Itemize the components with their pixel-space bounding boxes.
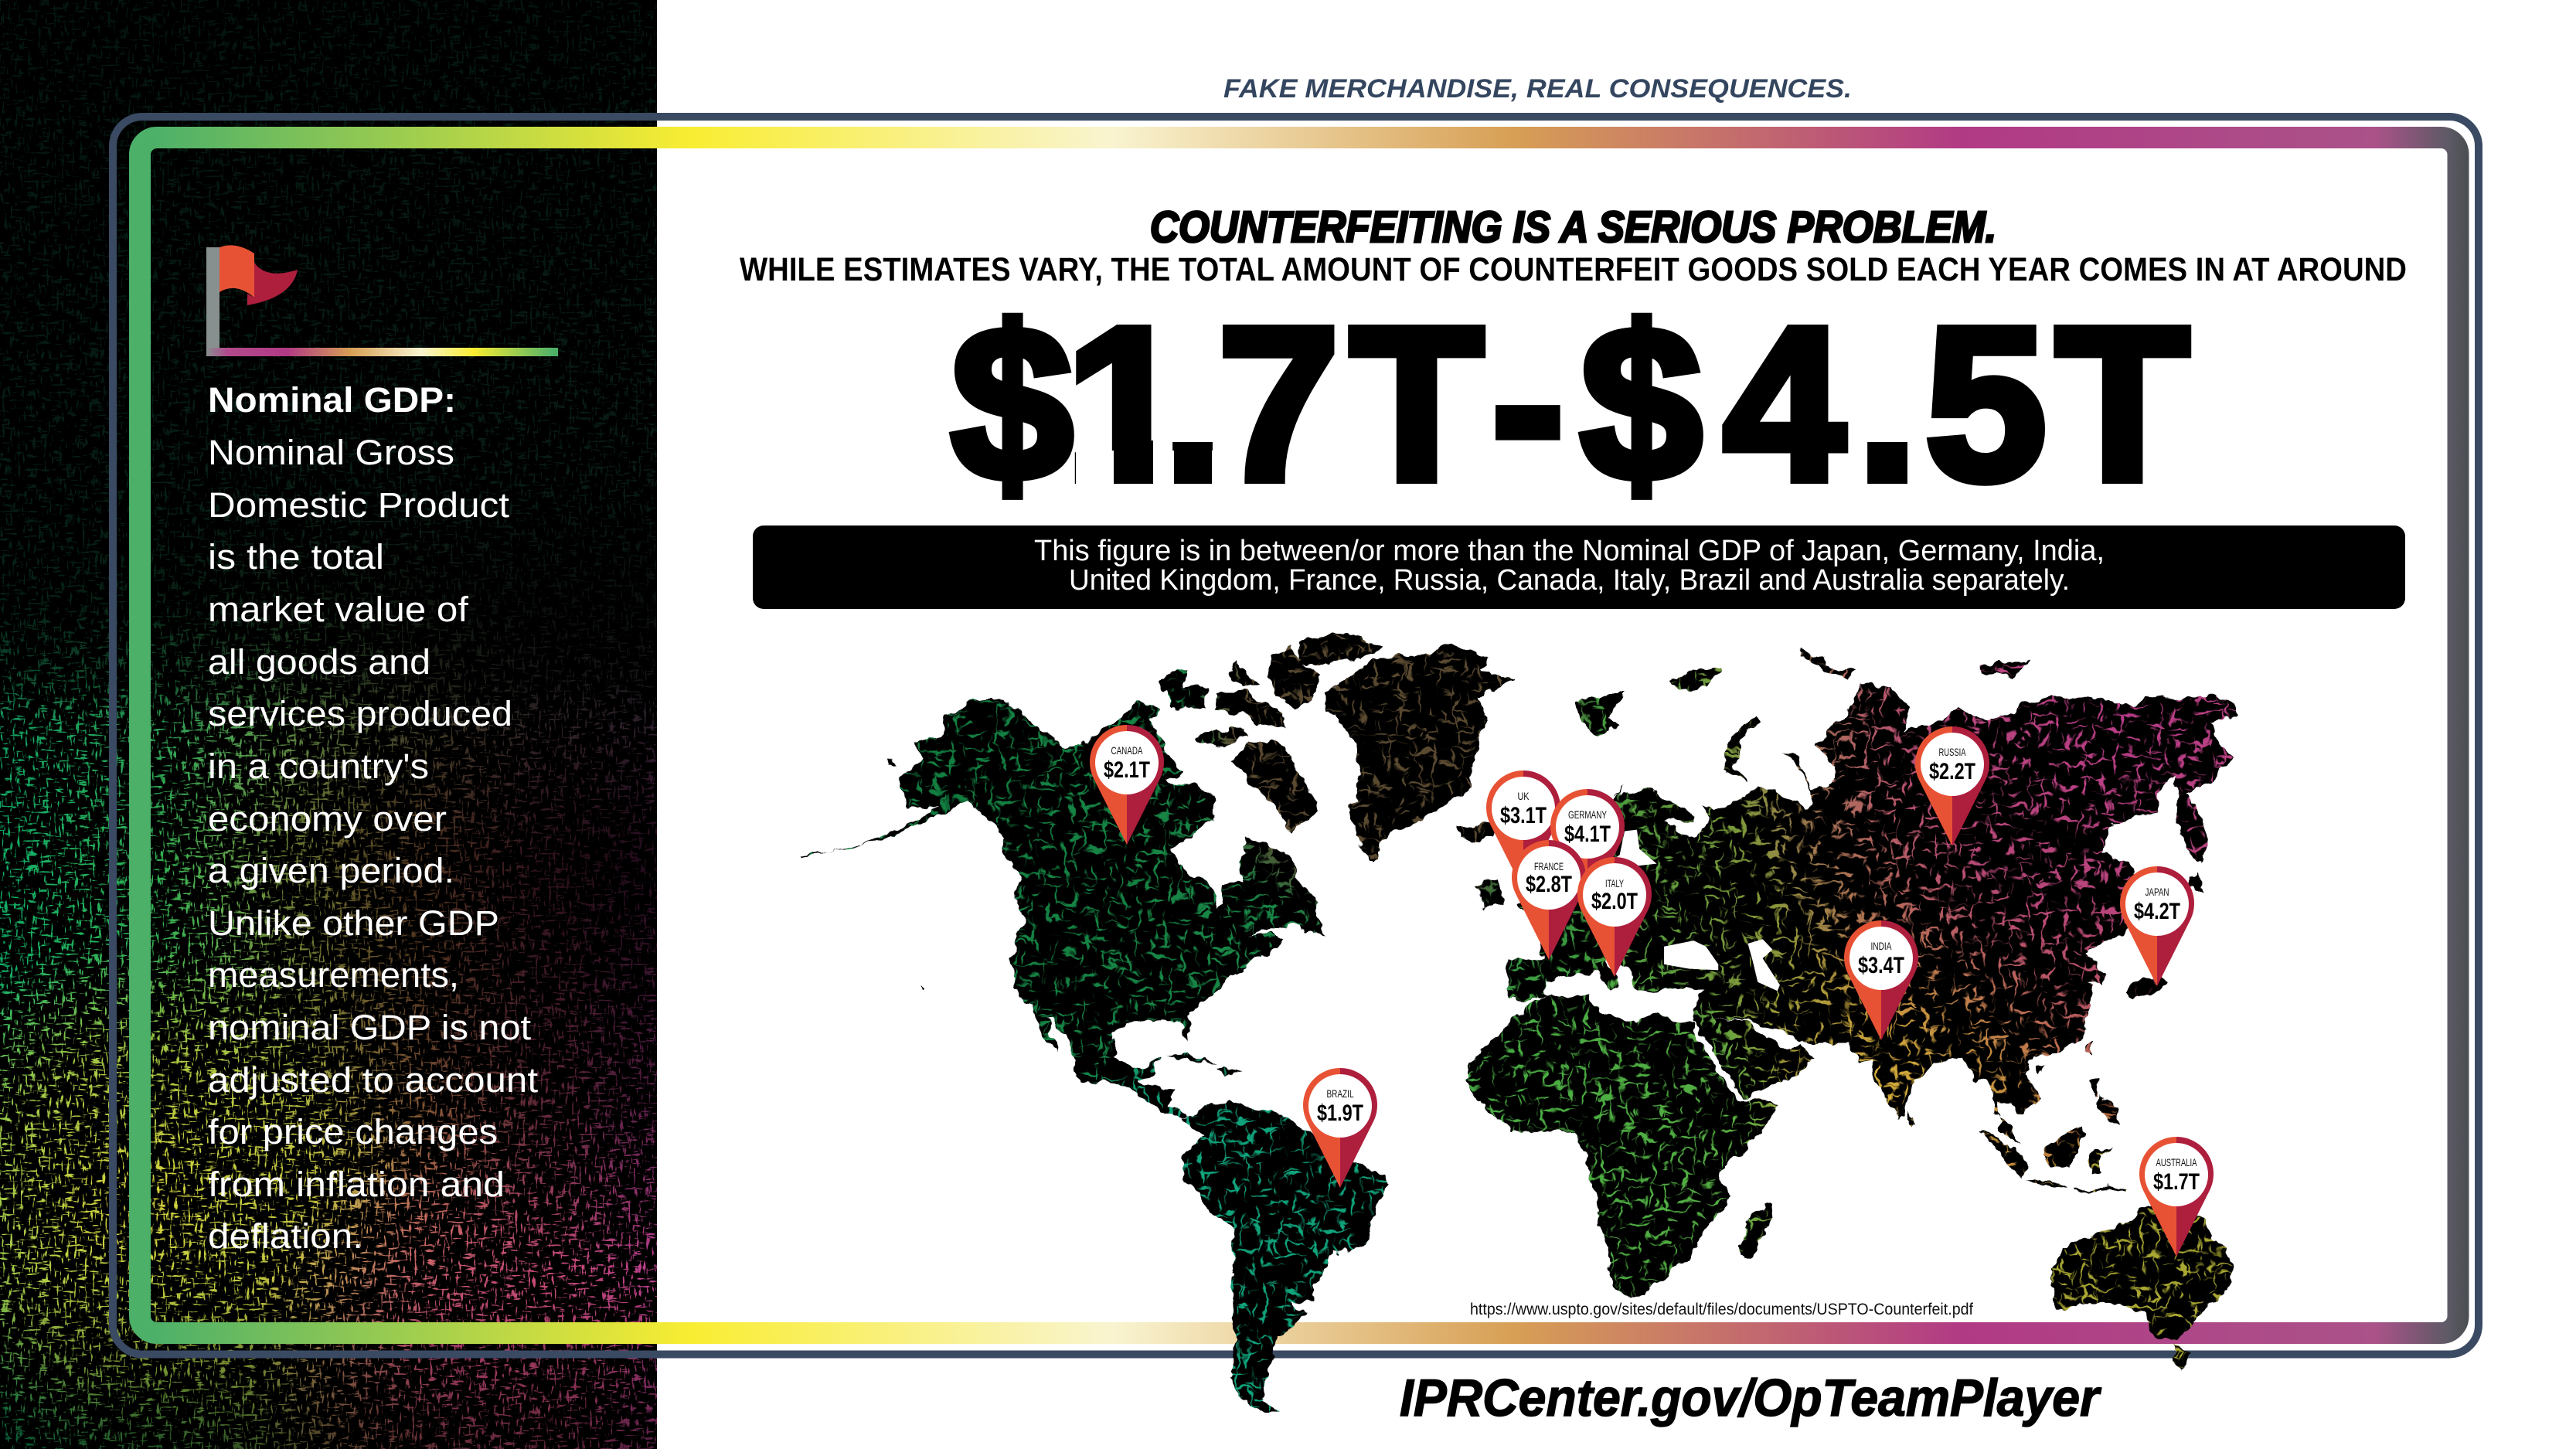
icon: flag — [206, 245, 558, 356]
big number: value range: $1.7T-$4.5T — [951, 282, 2189, 526]
pin: India: $3.4T — [1858, 953, 1904, 978]
pin: Germany: $4.1T — [1564, 821, 1611, 847]
pin: Italy: ITALY — [1605, 877, 1624, 889]
text block: nominal GDP definition: market value of — [208, 590, 469, 629]
pin: Canada: $2.1T — [1104, 757, 1150, 783]
callout: black comparison bar: United Kingdom, France, Russia, Canada, Italy, Brazil and Australia separately. — [1069, 564, 2070, 597]
tagline: FAKE MERCHANDISE, REAL CONSEQUENCES. — [1223, 74, 1852, 104]
pin: Italy — [1577, 857, 1652, 977]
pin: Australia — [2139, 1137, 2214, 1257]
subheading: annual estimate lead-in: WHILE ESTIMATES VARY, THE TOTAL AMOUNT OF COUNTERFEIT GOODS SOLD EACH YEAR COMES IN AT AROUND — [740, 251, 2407, 288]
source citation: https://www.uspto.gov/sites/default/files/documents/USPTO-Counterfeit.pdf — [1470, 1301, 1973, 1318]
pin: Japan — [2120, 866, 2194, 986]
pin: France: $2.8T — [1526, 872, 1572, 897]
frame: inner gradient border — [140, 138, 2458, 1333]
callout: black comparison bar: This figure is in between/or more than the Nominal GDP of Japan, Germany, India, — [1034, 535, 2105, 567]
pin: Canada — [1090, 725, 1164, 845]
pin: Japan: JAPAN — [2146, 886, 2169, 898]
pin: Brazil: BRAZIL — [1326, 1087, 1354, 1100]
pin: UK — [1486, 770, 1560, 890]
text block: nominal GDP definition: all goods and — [208, 642, 430, 682]
pin: Japan: $4.2T — [2134, 899, 2180, 924]
text block: nominal GDP definition: Unlike other GDP — [208, 903, 499, 943]
pin: France — [1512, 840, 1586, 960]
frame: outer navy border — [113, 117, 2479, 1354]
text block: nominal GDP definition: for price changes — [208, 1112, 498, 1151]
text block: nominal GDP definition: Domestic Product — [208, 485, 510, 525]
pin: Russia — [1915, 726, 1989, 846]
text block: nominal GDP definition: in a country's — [208, 747, 429, 786]
heading: counterfeiting is a serious problem: COUNTERFEITING IS A SERIOUS PROBLEM. — [1150, 202, 1996, 252]
text block: nominal GDP definition — [208, 380, 539, 1256]
pin: Russia: RUSSIA — [1938, 746, 1966, 758]
pin: Germany: GERMANY — [1568, 808, 1607, 821]
text block: nominal GDP definition: is the total — [208, 537, 384, 577]
pin: India — [1844, 920, 1918, 1040]
pin: Canada: CANADA — [1111, 744, 1143, 757]
pin: Australia: AUSTRALIA — [2156, 1156, 2197, 1168]
pin: Australia: $1.7T — [2153, 1169, 2200, 1195]
pin: Brazil: $1.9T — [1317, 1100, 1363, 1126]
pin: Italy: $2.0T — [1591, 889, 1638, 914]
pin: India: INDIA — [1870, 940, 1892, 952]
text block: nominal GDP definition: nominal GDP is not — [208, 1008, 532, 1047]
text block: nominal GDP definition: services produced — [208, 694, 512, 733]
text block: nominal GDP definition: measurements, — [208, 955, 459, 995]
pin: Germany — [1550, 789, 1625, 909]
pin: UK: $3.1T — [1500, 803, 1547, 828]
text block: nominal GDP definition: a given period. — [208, 851, 454, 890]
world map — [801, 632, 2238, 1413]
text block: nominal GDP definition: from inflation and — [208, 1165, 505, 1204]
text block: nominal GDP definition: Nominal Gross — [208, 433, 454, 472]
panel: left textured background — [0, 0, 657, 1449]
pin: Russia: $2.2T — [1929, 759, 1975, 784]
text block: nominal GDP definition: deflation. — [208, 1216, 363, 1256]
pin: France: FRANCE — [1534, 860, 1564, 872]
pin: Brazil — [1303, 1068, 1377, 1188]
text block: nominal GDP definition: Nominal GDP: — [208, 380, 456, 420]
footer url: IPRCenter.gov/OpTeamPlayer — [1400, 1369, 2101, 1427]
callout: black comparison bar — [753, 526, 2405, 609]
text block: nominal GDP definition: adjusted to account — [208, 1060, 539, 1100]
text block: nominal GDP definition: economy over — [208, 799, 447, 838]
pin: UK: UK — [1518, 790, 1530, 802]
